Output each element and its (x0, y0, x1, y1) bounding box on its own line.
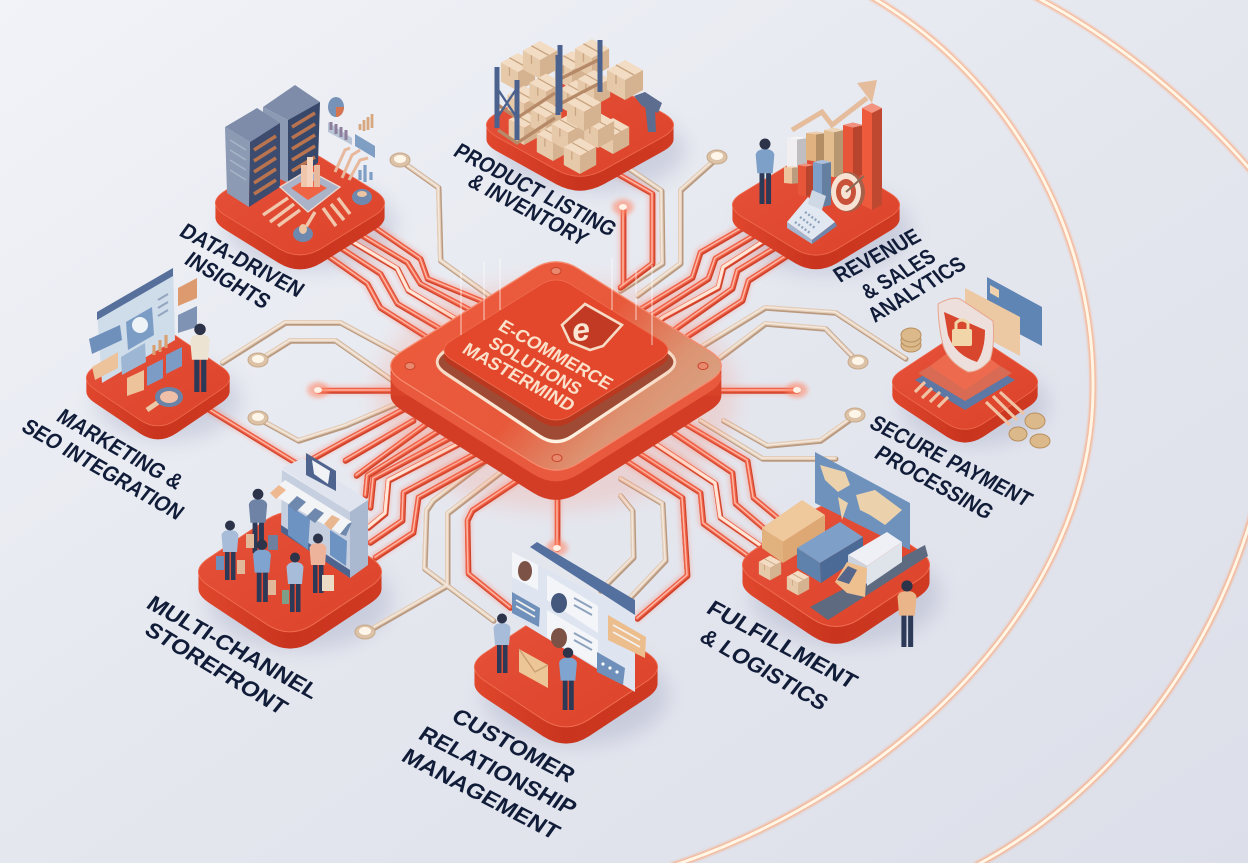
label: revenue and sales analytics: & SALES (856, 244, 940, 304)
crm window (512, 542, 635, 692)
barcode scanner (634, 92, 662, 132)
platform shadows (96, 108, 1048, 745)
person (756, 139, 774, 204)
shield with lock (938, 298, 994, 372)
person (897, 580, 917, 647)
label: secure payment processing: SECURE PAYMENT (865, 411, 1038, 512)
world map (815, 452, 910, 550)
floating icons (127, 278, 197, 396)
store (270, 458, 368, 578)
central chip (376, 258, 736, 510)
panel: multi-channel storefront (198, 453, 382, 649)
label: multi-channel storefront: MULTI-CHANNEL (142, 591, 324, 704)
magnifier (147, 387, 183, 410)
cardboard boxes (759, 556, 781, 580)
coins (901, 328, 1050, 448)
chip title: E-COMMERCE (495, 316, 617, 393)
light beams (461, 258, 652, 345)
bar chart (784, 103, 882, 210)
logo (562, 304, 622, 350)
corner studs (405, 268, 708, 462)
cash register (787, 190, 837, 244)
panel: marketing and seo integration (86, 268, 230, 439)
chat bubbles (512, 592, 646, 685)
growth arrow (792, 80, 877, 130)
label: fulfillment and logistics: FULFILLMENT (702, 596, 863, 694)
label: revenue and sales analytics (828, 224, 971, 327)
blue container (797, 522, 863, 583)
top plate (444, 280, 668, 426)
road (810, 545, 928, 620)
logo: e (569, 311, 592, 349)
server racks (225, 85, 320, 207)
panel: secure payment processing (892, 277, 1050, 448)
label: customer relationship management (397, 704, 582, 844)
mini chip (263, 148, 372, 242)
panel: customer relationship management (474, 542, 658, 744)
gold ring (437, 282, 675, 442)
panel: data-driven insights (215, 85, 385, 269)
label: fulfillment and logistics (695, 596, 863, 715)
envelope (519, 649, 548, 688)
panel: product listing and inventory (486, 39, 674, 191)
label: customer relationship management: CUSTOMER (447, 704, 580, 787)
circuit traces (207, 157, 906, 633)
label: product listing and inventory: PRODUCT LISTING (449, 139, 622, 241)
stacked boxes (537, 60, 643, 174)
shoppers (216, 489, 334, 612)
label: revenue and sales analytics: REVENUE (828, 224, 925, 287)
glowing arcs (672, 0, 1248, 863)
panel: revenue and sales analytics (732, 80, 900, 269)
secure chip (915, 340, 1024, 425)
people (494, 614, 510, 673)
warehouse shelving (497, 39, 610, 145)
label: product listing and inventory: & INVENTORY (463, 169, 594, 251)
label: fulfillment and logistics: & LOGISTICS (695, 624, 833, 715)
person (190, 324, 210, 392)
chip title: SOLUTIONS (485, 333, 586, 399)
chip title: MASTERMIND (459, 339, 579, 415)
label: marketing and seo integration: MARKETING & (52, 404, 189, 494)
label: multi-channel storefront: STOREFRONT (140, 617, 293, 720)
truck (835, 532, 902, 597)
panel: fulfillment and logistics (742, 452, 930, 647)
tan container (762, 500, 825, 563)
store sign (306, 453, 336, 491)
label: customer relationship management: RELATIONSHIP (414, 722, 582, 820)
label: data-driven insights: DATA-DRIVEN (175, 219, 309, 302)
floating charts (328, 97, 375, 182)
label: marketing and seo integration: SEO INTEGRATION (17, 414, 189, 524)
trace end nodes (248, 150, 868, 639)
label: data-driven insights: INSIGHTS (180, 247, 276, 313)
label: secure payment processing: PROCESSING (870, 441, 999, 524)
target (831, 172, 865, 212)
credit cards (965, 277, 1042, 356)
label: revenue and sales analytics: ANALYTICS (862, 252, 971, 327)
label: customer relationship management: MANAGEMENT (397, 744, 565, 844)
chip title (459, 316, 617, 415)
browser panel (89, 268, 175, 383)
